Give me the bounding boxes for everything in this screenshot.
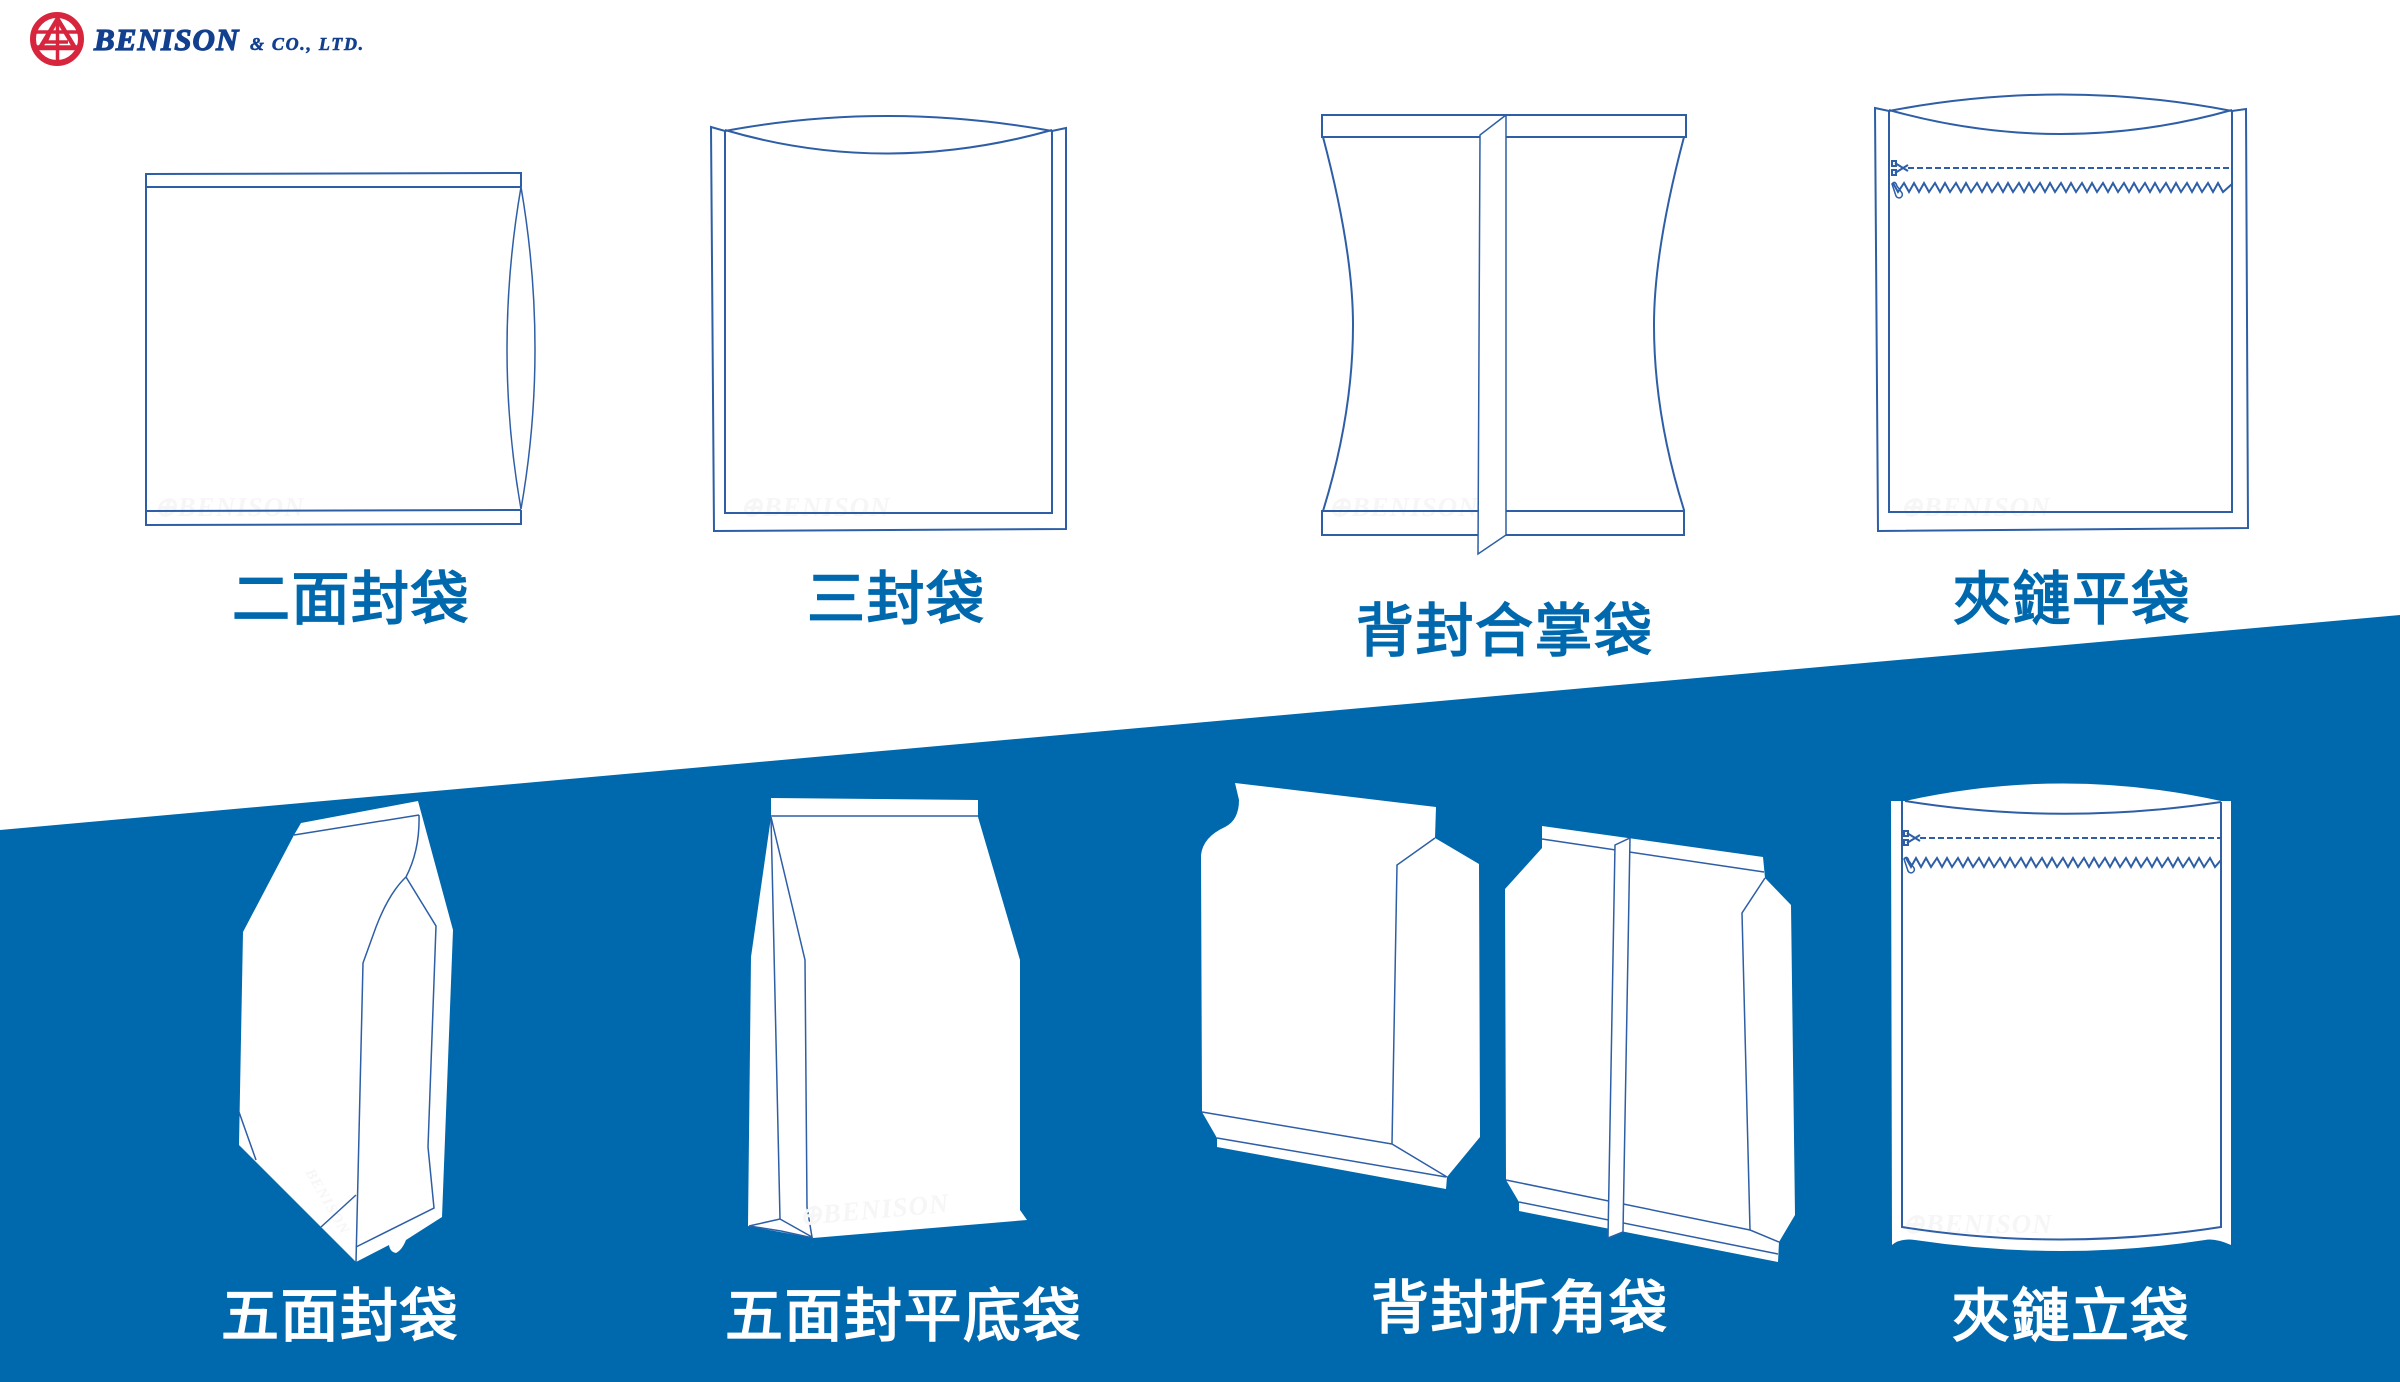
bag: back seal gusset, back view: [1505, 826, 1795, 1262]
center fin: [1478, 115, 1506, 554]
bag: two-side seal: [146, 173, 535, 525]
zipper pull: [1904, 857, 1914, 873]
watermark: ⊕BENISON: [1328, 492, 1479, 522]
watermark: ⊕BENISON: [1900, 492, 2051, 522]
watermark: ⊕BENISON: [1902, 1209, 2053, 1239]
zipper: [1893, 183, 2232, 192]
label: 二面封袋: 二面封袋: [232, 552, 470, 636]
bag: zipper stand-up: [1891, 784, 2231, 1251]
bag: back seal fin: [1322, 115, 1686, 554]
label: 背封折角袋: 背封折角袋: [1371, 1261, 1669, 1345]
bag: three-side seal: [711, 116, 1066, 531]
label: 夾鏈立袋: 夾鏈立袋: [1952, 1269, 2190, 1353]
watermark: ⊕BENISON: [154, 492, 305, 522]
logo wordmark: BENISON: [93, 22, 240, 57]
label: 夾鏈平袋: 夾鏈平袋: [1953, 552, 2191, 636]
zipper: [1906, 858, 2221, 867]
logo suffix: & CO., LTD.: [250, 34, 365, 54]
center fin: [1608, 838, 1630, 1238]
bag: back seal gusset, front view: [1201, 783, 1480, 1189]
label: 背封合掌袋: 背封合掌袋: [1356, 584, 1654, 668]
label: 五面封平底袋: 五面封平底袋: [725, 1269, 1082, 1353]
watermark: ⊕BENISON: [798, 1188, 951, 1231]
scissors icon: [1907, 833, 1920, 843]
scissor handles: [1904, 831, 1908, 845]
company logo: [33, 15, 365, 63]
tear line: [1908, 167, 2232, 169]
bag: five-side seal: [239, 801, 453, 1262]
logo emblem: [33, 15, 81, 63]
bag: five-side flat bottom: [748, 798, 1027, 1238]
scissor handles: [1892, 161, 1896, 175]
watermark: BENISON: [301, 1165, 352, 1238]
tear line: [1920, 837, 2221, 839]
watermark: ⊕BENISON: [740, 492, 891, 522]
label: 三封袋: 三封袋: [807, 552, 986, 636]
blue diagonal background panel: [0, 615, 2400, 1382]
bag: zipper flat: [1875, 94, 2248, 531]
zipper pull: [1892, 182, 1902, 198]
scissors icon: [1895, 163, 1908, 173]
label: 五面封袋: 五面封袋: [221, 1269, 459, 1353]
